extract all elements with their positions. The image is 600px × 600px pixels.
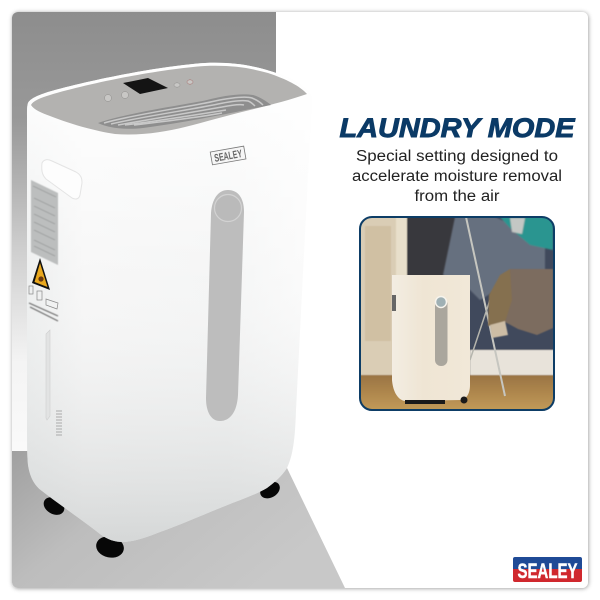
- control buttons: [104, 80, 193, 102]
- front grey panel: [206, 190, 244, 421]
- unit label: [392, 295, 396, 311]
- unit wheels: [405, 396, 468, 404]
- title: LAUNDRY MODE: [340, 113, 576, 143]
- description: accelerate moisture removal: [352, 168, 562, 185]
- hanging laundry: [443, 217, 553, 300]
- carry handle: [42, 160, 82, 199]
- lifestyle photo: [360, 217, 554, 410]
- dehumidifier product: [27, 63, 312, 560]
- rug: [488, 269, 553, 338]
- water level window: [46, 330, 50, 420]
- side grille: [56, 411, 62, 435]
- rear air vent: [98, 94, 271, 129]
- power ring: [214, 194, 242, 222]
- castor wheels: [40, 478, 283, 560]
- photo frame: [360, 217, 554, 410]
- main body: [27, 63, 312, 542]
- unit in photo: [392, 275, 470, 401]
- brand badge: SEALEY: [213, 148, 244, 165]
- description: from the air: [414, 188, 500, 205]
- Sealey logo: SEALEY: [518, 560, 578, 583]
- airer pole: [466, 217, 505, 396]
- display screen: [123, 78, 168, 94]
- unit panel: [435, 298, 448, 366]
- pictograms: [29, 286, 58, 309]
- photo background: [360, 217, 554, 410]
- warning triangle: [32, 258, 50, 290]
- description: Special setting designed to: [356, 148, 558, 165]
- Sealey logo: [513, 557, 582, 583]
- brand badge: [210, 146, 246, 165]
- warning text: [29, 303, 58, 321]
- second airer pole: [470, 300, 490, 360]
- unit ring: [436, 296, 446, 308]
- top control deck: [31, 66, 307, 135]
- rating label: [31, 180, 58, 265]
- description: [352, 148, 562, 205]
- grey backdrop: [12, 12, 345, 588]
